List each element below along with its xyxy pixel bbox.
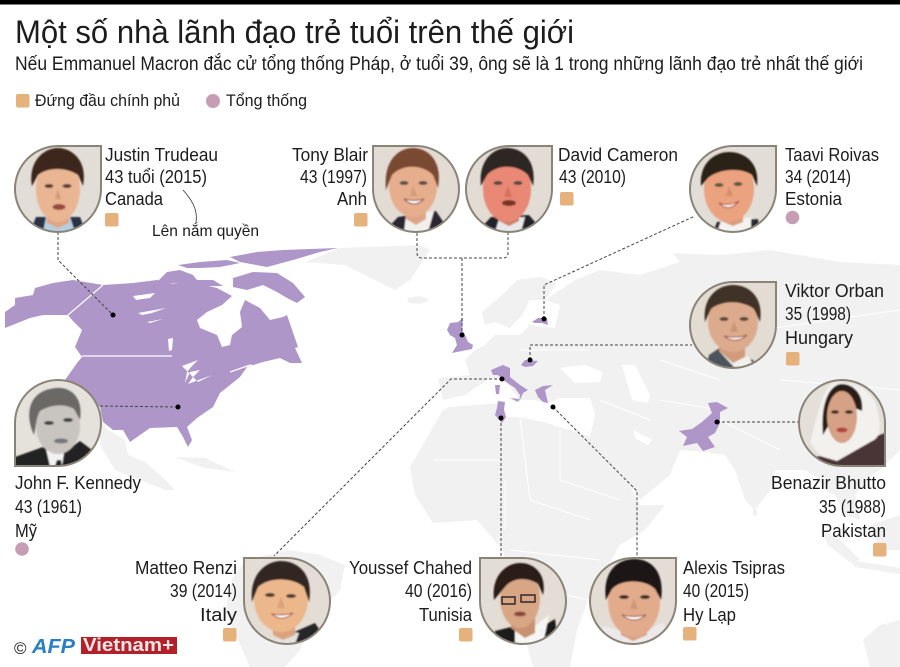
info: Youssef Chahed: Youssef Chahed <box>349 558 472 578</box>
info: Justin Trudeau: Justin Trudeau <box>105 145 218 165</box>
copyright symbol: © <box>14 639 27 658</box>
footer credit <box>14 635 177 658</box>
portrait: Taavi Roivas <box>690 146 776 232</box>
info: Matteo Renzi: Italy <box>200 605 237 625</box>
highlighted: Pakistan <box>679 402 728 451</box>
info: Matteo Renzi: 39 (2014) <box>170 581 237 601</box>
info: Youssef Chahed <box>349 558 473 642</box>
info: Benazir Bhutto: Pakistan <box>821 521 886 541</box>
info: John F. Kennedy: Mỹ <box>15 521 37 541</box>
info: Youssef Chahed: Tunisia <box>419 605 473 625</box>
info: John F. Kennedy: John F. Kennedy <box>15 473 141 493</box>
info: Matteo Renzi <box>135 558 237 642</box>
info: Benazir Bhutto <box>771 473 886 556</box>
AFP logo: AFP <box>31 636 76 658</box>
legend: president: Tổng thống <box>226 91 307 110</box>
portrait: Youssef Chahed <box>480 558 566 644</box>
highlighted: Italy <box>491 365 528 402</box>
info: Justin Trudeau: Canada <box>105 189 164 209</box>
highlighted: North America <box>5 248 338 447</box>
info: David Cameron: David Cameron <box>558 145 678 165</box>
portrait: Alexis Tsipras <box>590 558 676 644</box>
white seas and borders <box>433 310 900 600</box>
Vietnam+ logo: Vietnam+ <box>83 635 174 655</box>
info: Viktor Orban <box>785 281 884 366</box>
info: Matteo Renzi: Matteo Renzi <box>135 558 237 578</box>
portrait: David Cameron <box>466 146 552 232</box>
info: Alexis Tsipras: 40 (2015) <box>683 581 749 601</box>
info: Taavi Roivas: Estonia <box>785 189 843 209</box>
info: Taavi Roivas <box>785 145 879 224</box>
connector lines <box>58 216 800 557</box>
title: Một số nhà lãnh đạo trẻ tuổi trên thế giới <box>15 14 574 50</box>
info: Viktor Orban: 35 (1998) <box>785 304 851 324</box>
highlighted: Hungary <box>521 360 538 367</box>
info: Alexis Tsipras: Hy Lạp <box>683 605 736 625</box>
glasses <box>502 595 535 604</box>
portrait: Benazir Bhutto <box>799 380 885 466</box>
info: Justin Trudeau <box>105 145 218 226</box>
info: John F. Kennedy: 43 (1961) <box>15 497 82 517</box>
portrait: Matteo Renzi <box>244 558 330 644</box>
info: David Cameron: 43 (2010) <box>559 167 626 187</box>
info: Justin Trudeau: 43 tuổi (2015) <box>105 167 207 187</box>
grey land masses <box>100 245 900 667</box>
lakes and borders in North America <box>68 285 262 384</box>
info: Taavi Roivas: Taavi Roivas <box>785 145 879 165</box>
info: Alexis Tsipras <box>683 558 785 640</box>
legend <box>16 91 307 110</box>
info: Tony Blair: Anh <box>337 189 367 209</box>
info: Viktor Orban: Viktor Orban <box>785 281 884 301</box>
info: Alexis Tsipras: Alexis Tsipras <box>683 558 785 578</box>
info: Tony Blair <box>292 145 368 226</box>
info: Benazir Bhutto: Benazir Bhutto <box>771 473 886 493</box>
info: Youssef Chahed: 40 (2016) <box>405 581 472 601</box>
portrait: Tony Blair <box>373 146 459 232</box>
info: Tony Blair: 43 (1997) <box>300 167 367 187</box>
annotation: took office <box>152 190 259 240</box>
info: John F. Kennedy <box>15 473 141 556</box>
highlighted: United Kingdom <box>447 318 473 353</box>
legend: head of government: Đứng đầu chính phủ <box>35 91 180 110</box>
info: Benazir Bhutto: 35 (1988) <box>819 497 886 517</box>
portrait: Justin Trudeau <box>15 146 101 232</box>
portrait: John F. Kennedy <box>15 380 101 466</box>
world map <box>5 245 900 667</box>
highlighted: Tunisia <box>495 401 506 423</box>
info: Viktor Orban: Hungary <box>785 328 853 348</box>
info: Tony Blair: Tony Blair <box>292 145 368 165</box>
info: David Cameron <box>558 145 678 206</box>
highlighted: Estonia <box>532 318 548 325</box>
highlighted: Greece <box>535 385 553 403</box>
portrait: Viktor Orban <box>690 282 776 368</box>
info: Taavi Roivas: 34 (2014) <box>785 167 851 187</box>
annotation: took office: Lên nắm quyền <box>152 221 259 240</box>
